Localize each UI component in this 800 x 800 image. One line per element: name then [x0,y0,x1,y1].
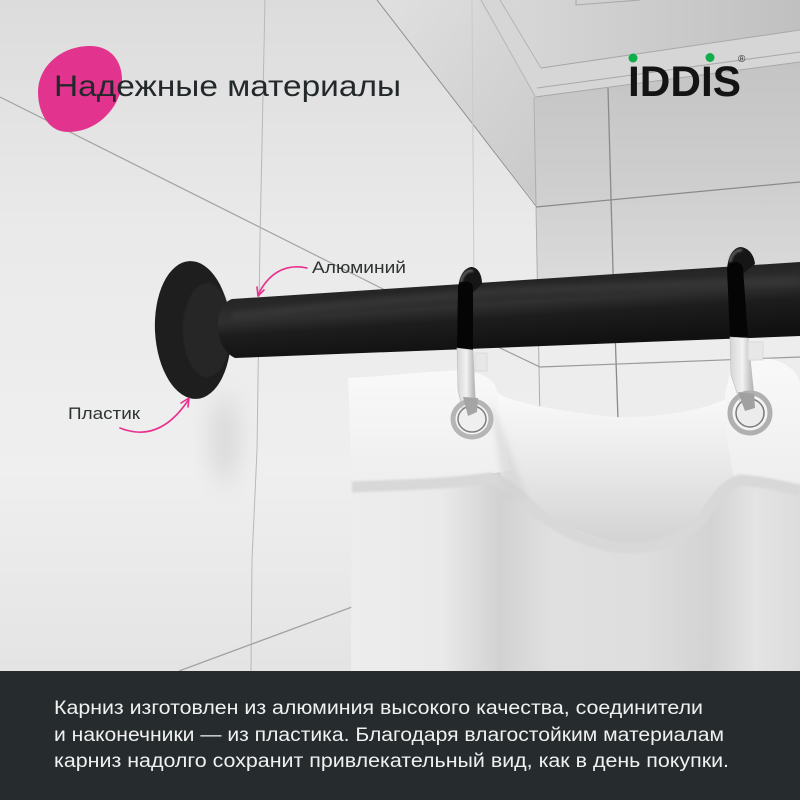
eyelet inner ring [736,399,764,427]
curtain top right panel [725,359,800,488]
curtain lower body [351,440,800,671]
eyelet inner ring [458,406,486,432]
ring clear strap [730,337,755,408]
description text [54,698,729,772]
wall flange [151,259,235,401]
ring highlight [730,250,742,262]
curtain hem band [352,478,800,548]
metal eyelet [453,401,491,437]
callout: plastic [68,398,189,432]
ring black front strap [727,262,748,338]
right lower tiled wall [538,270,800,440]
wall section beside the corner [377,0,538,207]
rod highlight [232,280,800,316]
ceiling [478,0,800,68]
right upper tiled wall [535,62,800,300]
label aluminium: Алюминий [312,258,406,277]
flange raised collar [183,283,231,377]
clip tab [475,353,487,371]
line 2: и наконечники — из пластика. Благодаря влагостойким материалам [54,725,724,746]
metal eyelet [730,393,770,433]
callout: aluminium [257,258,406,296]
clear clip tip [463,397,478,416]
ring black front strap [457,282,473,350]
ring highlight [461,271,473,282]
curtain pocket between the rings [490,392,738,546]
rod assembly [151,259,800,401]
left curtain ring [453,267,491,437]
pink blob behind title [38,46,122,132]
ring back loop [458,267,482,295]
right curtain ring [727,247,770,433]
shadow under flange [211,395,239,485]
rod tube [218,262,800,358]
curtain top left panel [348,370,510,486]
clip tab [748,342,763,360]
arrow to flange [120,398,189,432]
line 3: карниз надолго сохранит привлекательный вид, как в день покупки. [54,751,729,772]
arrow to rod [257,267,307,296]
curtain fold shadows [490,400,530,500]
label plastic: Пластик [68,404,141,423]
logo green dot 2 [706,53,714,62]
title: Надежные материалы [54,70,401,103]
logo green dot 1 [628,54,638,62]
shower curtain [348,359,800,671]
clear clip tip [738,392,755,411]
crown molding [478,0,800,97]
logo wordmark: IDDIS [628,58,741,106]
logo: IDDIS [628,53,746,106]
registered mark: ® [738,54,746,65]
ring clear strap [457,348,476,416]
line 1: Карниз изготовлен из алюминия высокого качества, соединители [54,698,703,719]
dark bottom panel [0,671,800,800]
ring back loop [727,247,755,276]
